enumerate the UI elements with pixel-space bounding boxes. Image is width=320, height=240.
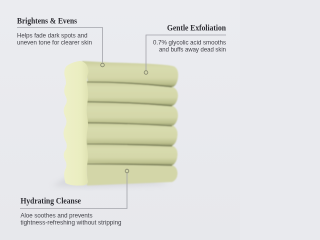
heading: Gentle Exfoliation: [167, 22, 226, 32]
description: Helps fade dark spots and: [17, 32, 88, 40]
description: 0.7% glycolic acid smooths: [153, 40, 227, 46]
callout: Hydrating Cleanse: [20, 169, 129, 226]
callout: Brightens & Evens: [17, 16, 104, 67]
leader line: [20, 173, 127, 208]
anchor dot: [125, 169, 129, 173]
soap bar: [64, 61, 178, 186]
callout: Gentle Exfoliation: [144, 22, 227, 74]
leader line: [146, 35, 226, 70]
soap ground shadow: [52, 176, 170, 187]
heading: Hydrating Cleanse: [20, 196, 81, 206]
leader line: [17, 28, 102, 62]
grooves: [87, 82, 172, 165]
heading: Brightens & Evens: [17, 16, 78, 26]
description: tightness-refreshing without stripping: [20, 220, 122, 226]
ribbed front of soap: [82, 61, 178, 186]
description: Aloe soothes and prevents: [20, 212, 93, 220]
description: and buffs away dead skin: [159, 46, 226, 54]
soap end face: [64, 61, 88, 186]
anchor dot: [144, 71, 148, 74]
anchor dot: [101, 63, 104, 67]
description: uneven tone for clearer skin: [17, 40, 92, 46]
